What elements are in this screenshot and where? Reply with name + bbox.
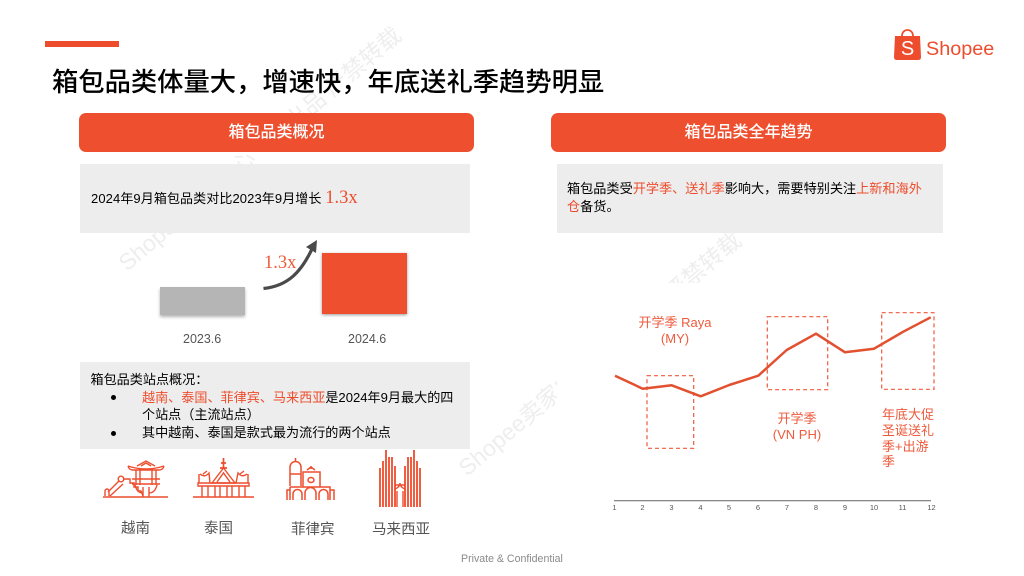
header: right panel: 箱包品类全年趋势 [684, 124, 812, 141]
label: Vietnam: 越南 [121, 521, 150, 537]
footer: Private & Confidential [461, 553, 563, 565]
arrow: growth [263, 240, 317, 290]
annotation: Raya season [639, 315, 712, 346]
x axis labels: 5 [727, 503, 731, 512]
trend line [615, 317, 931, 396]
label: Malaysia: 马来西亚 [372, 522, 430, 538]
text block: yearly trend summary [557, 164, 943, 233]
annotation: back to school [773, 411, 821, 442]
icon: Thailand temple [193, 458, 254, 498]
annotation: back to school: 开学季 [777, 411, 816, 426]
x axis [614, 500, 931, 502]
header: left panel [79, 113, 474, 152]
label: 2024.6: 2024.6 [348, 332, 386, 346]
annotation: year end [882, 407, 934, 469]
x axis labels: 6 [756, 503, 760, 512]
annotation: year end: 年底大促 [882, 407, 934, 422]
label: 2023.6: 2023.6 [183, 332, 221, 346]
logo: Shopee: S [901, 38, 914, 60]
growth multiplier: 1.3x [264, 253, 296, 273]
bar: 2024.6 [322, 253, 407, 314]
highlight box: Raya [647, 376, 694, 448]
logo: Shopee [894, 29, 994, 60]
watermark: background: Shopee卖家中心 [113, 145, 261, 276]
text block: yearly trend summary: 箱包品类受开学季、送礼季影响大，需要特别关注上新和海外仓备货。 [567, 181, 922, 214]
x axis labels [612, 503, 936, 512]
site bullet text 2: 其中越南、泰国是款式最为流行的两个站点 [142, 425, 391, 440]
annotation: year end: 季 [882, 454, 895, 469]
annotation: year end: 季+出游 [882, 439, 929, 454]
bar: 2023.6 [160, 287, 245, 315]
site bullet text 1: 越南、泰国、菲律宾、马来西亚是2024年9月最大的四个站点（主流站点） [142, 390, 453, 422]
icon: Vietnam pagoda [103, 460, 168, 498]
line chart: yearly trend [612, 312, 936, 512]
x axis labels: 4 [698, 503, 703, 512]
x axis labels: 2 [640, 503, 645, 512]
x axis labels: 10 [870, 503, 878, 512]
text block: site overview [80, 362, 470, 449]
icon: Malaysia twin towers [379, 450, 421, 507]
text block: site overview: 箱包品类站点概况： [90, 372, 208, 386]
highlight box: year end [882, 313, 934, 389]
x axis labels: 9 [843, 503, 847, 512]
bullet 1 [111, 395, 116, 400]
x axis labels: 1 [612, 503, 617, 512]
bar chart: yearly comparison [158, 240, 409, 346]
watermark: background: 出品 严禁转载 [279, 22, 406, 135]
annotation: year end: 圣诞送礼 [882, 423, 934, 438]
watermark: background: 出品 严禁转载 [619, 227, 746, 340]
icon: Philippines church [286, 458, 335, 500]
x axis labels: 3 [669, 503, 674, 512]
x axis labels: 7 [785, 503, 789, 512]
label: Thailand: 泰国 [204, 521, 233, 537]
bullet 2 [111, 431, 116, 436]
x axis labels: 8 [814, 503, 818, 512]
annotation: back to school: (VN PH) [773, 427, 821, 442]
x axis labels: 11 [899, 503, 906, 512]
logo: Shopee: Shopee [926, 38, 994, 60]
accent bar [45, 41, 119, 47]
text block: growth summary: 2024年9月箱包品类对比2023年9月增长 1.3x [91, 188, 358, 208]
label: Philippines: 菲律宾 [291, 522, 334, 538]
annotation: Raya season: (MY) [661, 331, 689, 346]
x axis labels: 12 [927, 503, 936, 512]
highlight box: back to school [767, 317, 828, 390]
annotation: Raya season: 开学季 Raya [639, 315, 711, 330]
text block: growth summary [80, 164, 470, 233]
watermark: background: Shopee卖家中心 [453, 350, 601, 481]
header: left panel: 箱包品类概况 [228, 124, 324, 141]
header: right panel [551, 113, 946, 152]
title: 箱包品类体量大，增速快，年底送礼季趋势明显 [52, 67, 604, 97]
